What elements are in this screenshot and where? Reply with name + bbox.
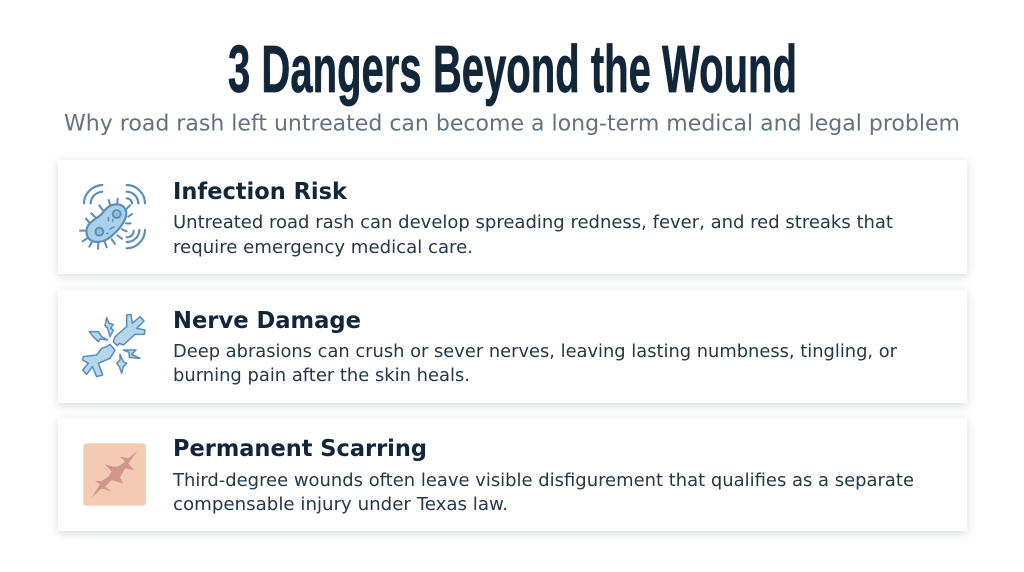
heading: permanent scarring: Permanent Scarring — [173, 436, 427, 462]
heading: nerve damage: Nerve Damage — [173, 308, 361, 334]
icon: bacterium with motion arcs — [80, 185, 145, 249]
text: nerve damage line 2: burning pain after the skin heals. — [173, 366, 470, 386]
card background: infection risk — [58, 160, 967, 274]
panel: infection risk — [80, 179, 893, 258]
subtitle: Why road rash left untreated can become a long-term medical and legal problem — [64, 112, 960, 136]
icon: scar on skin patch — [83, 443, 146, 506]
panel: nerve damage — [83, 308, 898, 386]
text: infection risk line 2: require emergency medical care. — [173, 238, 473, 258]
icon: severed nerve with sparks — [83, 314, 145, 377]
text: infection risk line 1: Untreated road rash can develop spreading redness, fever, and red streaks that — [173, 213, 893, 233]
heading: infection risk: Infection Risk — [173, 179, 348, 205]
text: permanent scarring line 2: compensable injury under Texas law. — [173, 495, 508, 515]
text: nerve damage line 1: Deep abrasions can crush or sever nerves, leaving lasting numbness, tingling, or — [173, 342, 898, 362]
card background: nerve damage — [58, 290, 967, 403]
card background: permanent scarring — [58, 418, 967, 531]
text: permanent scarring line 1: Third-degree wounds often leave visible disfigurement that qualifies as a separate — [172, 471, 914, 491]
panel: permanent scarring — [83, 436, 914, 515]
